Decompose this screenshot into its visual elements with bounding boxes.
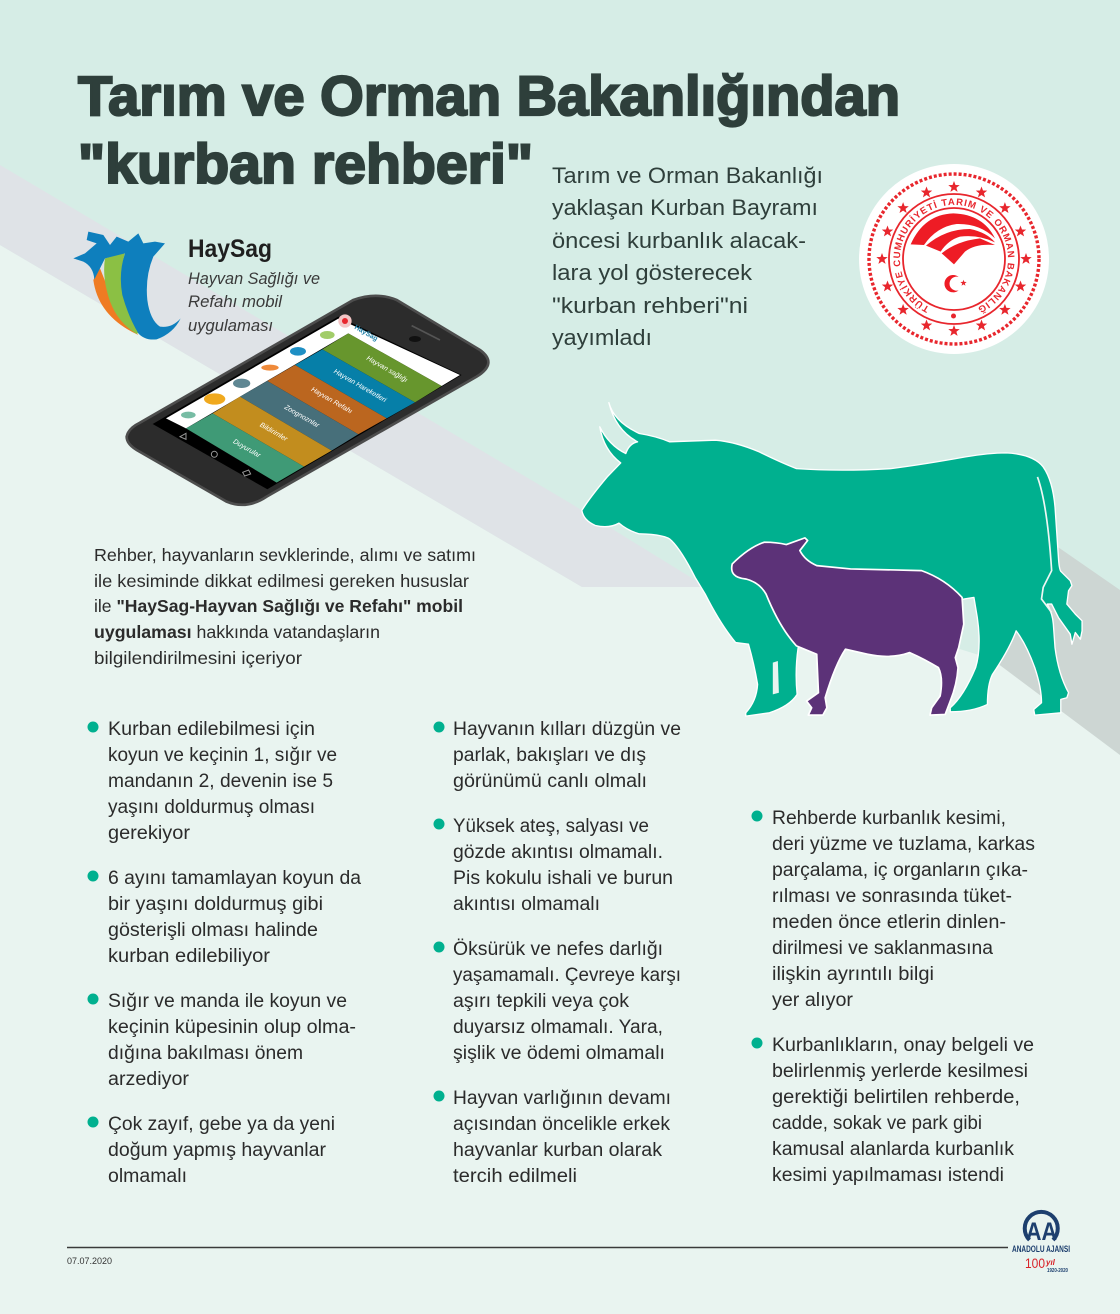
header summary text: lara yol gösterecek bbox=[552, 260, 753, 285]
bullet: cough: aşırı tepkili veya çok bbox=[453, 991, 630, 1012]
HaySag description: uygulaması bbox=[188, 316, 273, 335]
bullet: ear tag bbox=[88, 991, 356, 1090]
icon: Anadolu Ajansı logo: 100 bbox=[1025, 1255, 1045, 1271]
bullet: ear tag: keçinin küpesinin olup olma- bbox=[108, 1017, 356, 1038]
bullet: male animals: açısından öncelikle erkek bbox=[453, 1114, 671, 1135]
phone mockup: Bildirimler bbox=[258, 422, 289, 443]
bullet: public places: kesimi yapılmaması istendi bbox=[772, 1165, 1004, 1186]
bullet: cough: yaşamamalı. Çevreye karşı bbox=[453, 965, 681, 986]
bullet: guide content bbox=[752, 808, 1035, 1011]
phone mockup: Hayvan Hareketleri bbox=[332, 368, 388, 404]
column 3 bullets bbox=[752, 808, 1035, 1186]
bullet: weak animals bbox=[88, 1114, 335, 1187]
bullet: ear tag: arzediyor bbox=[108, 1069, 190, 1090]
bullet: guide content: yer alıyor bbox=[772, 990, 854, 1011]
bullet: fever: Yüksek ateş, salyası ve bbox=[453, 816, 649, 837]
bullet: fever: Pis kokulu ishali ve burun bbox=[453, 868, 673, 889]
bullet: appearance: Hayvanın kılları düzgün ve bbox=[453, 719, 681, 740]
bullet: guide content: ilişkin ayrıntılı bilgi bbox=[772, 964, 934, 985]
bullet: guide content: Rehberde kurbanlık kesimi, bbox=[772, 808, 1006, 829]
bullet: male animals: tercih edilmeli bbox=[453, 1166, 577, 1187]
phone mockup: Duyurular bbox=[232, 438, 262, 460]
footer rule bbox=[67, 1246, 1008, 1248]
intro paragraph: bilgilendirilmesini içeriyor bbox=[94, 648, 302, 668]
bullet: six months: 6 ayını tamamlayan koyun da bbox=[108, 868, 361, 889]
icon: Anadolu Ajansı logo: ANADOLU AJANSI bbox=[1012, 1244, 1070, 1255]
bullet: guide content: rılması ve sonrasında tüket- bbox=[772, 886, 1012, 907]
bullet: age bbox=[88, 719, 337, 844]
cow silhouette bbox=[582, 403, 1082, 716]
intro paragraph bbox=[94, 545, 476, 668]
bullet: age: Kurban edilebilmesi için bbox=[108, 719, 315, 740]
bullet: appearance: parlak, bakışları ve dış bbox=[453, 745, 646, 766]
bullet: ear tag: dığına bakılması önem bbox=[108, 1043, 303, 1064]
bullet: guide content: meden önce etlerin dinlen- bbox=[772, 912, 1006, 933]
column 2 bullets bbox=[434, 719, 681, 1187]
bullet: fever: gözde akıntısı olmamalı. bbox=[453, 842, 663, 863]
bullet: cough: şişlik ve ödemi olmamalı bbox=[453, 1043, 665, 1064]
phone mockup: Hayvan Refahı bbox=[310, 386, 353, 416]
bullet: public places: gerektiği belirtilen rehberde, bbox=[772, 1087, 1020, 1108]
title: "kurban rehberi" bbox=[78, 132, 533, 195]
bullet: male animals: hayvanlar kurban olarak bbox=[453, 1140, 663, 1161]
header summary text: yaklaşan Kurban Bayramı bbox=[552, 195, 818, 220]
bullet: guide content: dirilmesi ve saklanmasına bbox=[772, 938, 993, 959]
bullet: male animals: Hayvan varlığının devamı bbox=[453, 1088, 671, 1109]
header summary text: öncesi kurbanlık alacak- bbox=[552, 228, 806, 253]
header summary text: yayımladı bbox=[552, 325, 652, 350]
header summary text: "kurban rehberi"ni bbox=[552, 293, 748, 318]
HaySag description: Hayvan Sağlığı ve bbox=[188, 269, 320, 288]
date: 07.07.2020 bbox=[67, 1256, 112, 1266]
intro paragraph: ile "HaySag-Hayvan Sağlığı ve Refahı" mobil bbox=[94, 596, 463, 616]
bullet: guide content: deri yüzme ve tuzlama, karkas bbox=[772, 834, 1035, 855]
HaySag heading bbox=[188, 235, 320, 335]
icon: Anadolu Ajansı logo: 1920-2020 bbox=[1047, 1268, 1068, 1274]
HaySag description bbox=[188, 269, 320, 335]
bullet: guide content: parçalama, iç organların çıka- bbox=[772, 860, 1028, 881]
intro paragraph: uygulaması hakkında vatandaşların bbox=[94, 622, 380, 642]
bullet: six months: bir yaşını doldurmuş gibi bbox=[108, 894, 323, 915]
phone mockup: Hayvan sağlığı bbox=[365, 355, 409, 384]
bullet: male animals bbox=[434, 1088, 671, 1187]
bullet: public places: Kurbanlıkların, onay belgeli ve bbox=[772, 1035, 1034, 1056]
icon: HaySag logo bbox=[73, 232, 181, 340]
phone mockup: Zoognoznlar bbox=[282, 403, 321, 430]
bullet: appearance bbox=[434, 719, 681, 792]
bullet: weak animals: olmamalı bbox=[108, 1166, 187, 1187]
bullet: appearance: görünümü canlı olmalı bbox=[453, 771, 647, 792]
bullet: age: mandanın 2, devenin ise 5 bbox=[108, 771, 333, 792]
intro paragraph: Rehber, hayvanların sevklerinde, alımı ve satımı bbox=[94, 545, 476, 565]
bullet: cough: Öksürük ve nefes darlığı bbox=[453, 939, 663, 960]
header summary text bbox=[552, 163, 823, 350]
header summary text: Tarım ve Orman Bakanlığı bbox=[552, 163, 823, 188]
icon: Anadolu Ajansı logo: yıl bbox=[1045, 1258, 1056, 1267]
icon: ministry seal bbox=[859, 164, 1049, 354]
bullet: public places: belirlenmiş yerlerde kesilmesi bbox=[772, 1061, 1028, 1082]
sheep silhouette bbox=[732, 538, 964, 715]
title: Tarım ve Orman Bakanlığından bbox=[78, 64, 900, 127]
bullet: public places: cadde, sokak ve park gibi bbox=[772, 1113, 982, 1134]
bullet: ear tag: Sığır ve manda ile koyun ve bbox=[108, 991, 347, 1012]
bullet: six months bbox=[88, 868, 361, 967]
title bbox=[78, 64, 900, 195]
bullet: weak animals: Çok zayıf, gebe ya da yeni bbox=[108, 1114, 335, 1135]
bullet: age: yaşını doldurmuş olması bbox=[108, 797, 315, 818]
HaySag heading: HaySag bbox=[188, 235, 272, 263]
icon: Anadolu Ajansı logo bbox=[1012, 1212, 1070, 1274]
HaySag description: Refahı mobil bbox=[188, 292, 283, 311]
phone mockup bbox=[127, 296, 488, 505]
bullet: fever bbox=[434, 816, 673, 915]
bullet: fever: akıntısı olmamalı bbox=[453, 894, 600, 915]
bullet: six months: gösterişli olması halinde bbox=[108, 920, 318, 941]
icon: ministry seal: TÜRKİYE CUMHURİYETİ TARIM VE ORMAN BAKANLIĞI bbox=[893, 198, 1014, 314]
bullet: cough bbox=[434, 939, 681, 1064]
bullet: age: gerekiyor bbox=[108, 823, 191, 844]
intro paragraph: ile kesiminde dikkat edilmesi gereken hususlar bbox=[94, 571, 469, 591]
bullet: cough: duyarsız olmamalı. Yara, bbox=[453, 1017, 663, 1038]
icon: Anadolu Ajansı logo: AA bbox=[1026, 1218, 1057, 1246]
bullet: age: koyun ve keçinin 1, sığır ve bbox=[108, 745, 337, 766]
phone mockup: HaySag bbox=[353, 324, 379, 343]
bullet: weak animals: doğum yapmış hayvanlar bbox=[108, 1140, 327, 1161]
bullet: public places bbox=[752, 1035, 1034, 1186]
bullet: public places: kamusal alanlarda kurbanlık bbox=[772, 1139, 1015, 1160]
bullet: six months: kurban edilebiliyor bbox=[108, 946, 271, 967]
column 1 bullets bbox=[88, 719, 361, 1187]
